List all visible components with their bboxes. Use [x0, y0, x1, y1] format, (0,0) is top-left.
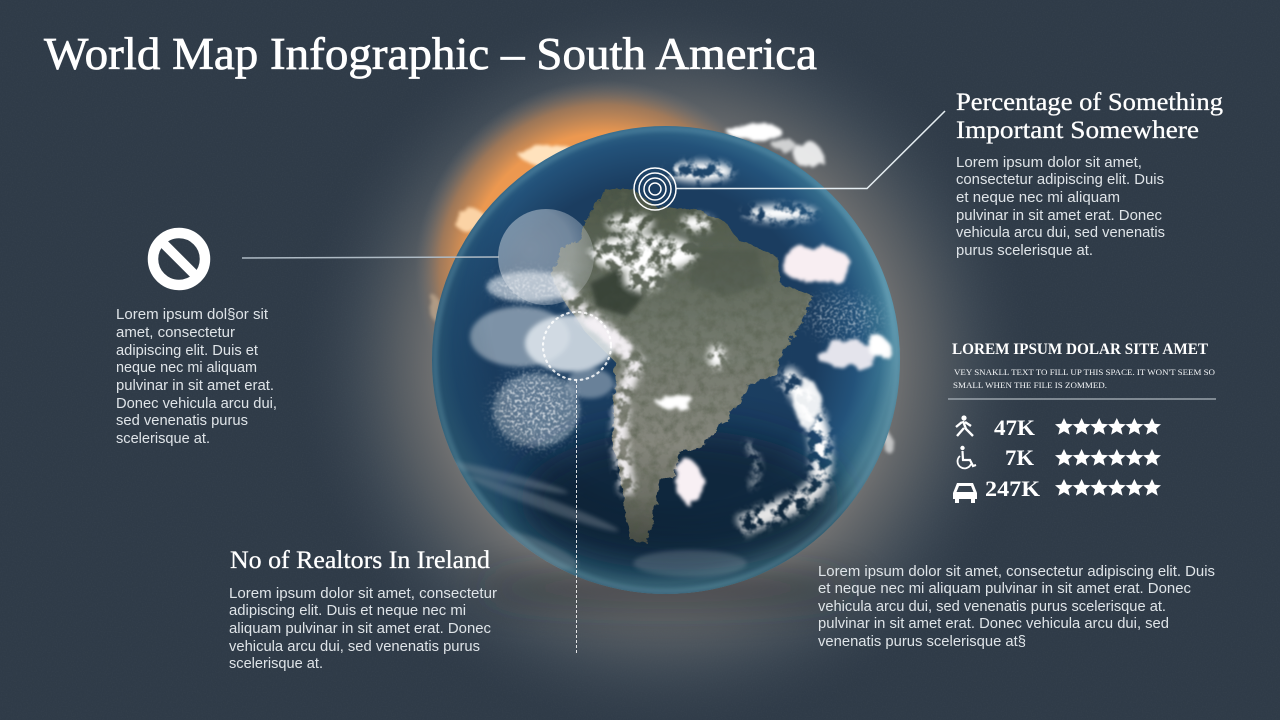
South America landmass: [438, 162, 889, 579]
fine speckled clouds: [493, 275, 880, 447]
broken clouds over the continent: [590, 162, 821, 527]
icon: car: [953, 483, 977, 503]
translucent highlight circle: [498, 209, 594, 305]
lower-right text block: et neque nec mi aliquam pulvinar in sit amet erat. Donec: [818, 580, 1191, 597]
globe: South America: [432, 126, 900, 604]
left text block: Lorem ipsum dol§or sit: [116, 306, 269, 323]
body text: vehicula arcu dui, sed venenatis purus: [229, 638, 480, 655]
dark southern ocean: [520, 430, 840, 570]
stats note: SMALL WHEN THE FILE IS ZOMMED.: [953, 380, 1107, 390]
heading: Important Somewhere: [956, 117, 1199, 144]
ocean sphere: [432, 126, 900, 594]
lower-right text block: Lorem ipsum dolor sit amet, consectetur adipiscing elit. Duis: [818, 563, 1215, 580]
leader line to upper-right callout: [676, 111, 945, 188]
star rating row 2: [1055, 449, 1161, 466]
body text: Lorem ipsum dolor sit amet,: [956, 154, 1142, 171]
lower-right text block: [818, 563, 1215, 650]
star rating row 1: [1055, 418, 1161, 435]
body text: Lorem ipsum dolor sit amet, consectetur: [229, 585, 497, 602]
icon: prohibited sign: [153, 233, 205, 285]
star rating row 3: [1055, 479, 1161, 496]
lower-right text block: pulvinar in sit amet erat. Donec vehicula arcu dui, sed: [818, 615, 1169, 632]
body text: aliquam pulvinar in sit amet erat. Donec: [229, 620, 491, 637]
atmosphere rim: [435, 129, 897, 591]
globe shadow: [478, 572, 858, 604]
left text block: pulvinar in sit amet erat.: [116, 377, 274, 394]
icon: wheelchair: [958, 446, 976, 468]
lower-right text block: venenatis purus scelerisque at§: [818, 633, 1026, 650]
left text block: neque nec mi aliquam: [116, 359, 257, 376]
grey glow behind globe: [295, 0, 1035, 720]
body text: [229, 585, 497, 672]
stat: 247K: 247K: [985, 476, 1040, 501]
left text block: [116, 306, 277, 447]
stats note: VEY SNAKLL TEXT TO FILL UP THIS SPACE. IT WON'T SEEM SO: [954, 367, 1215, 377]
body text: et neque nec mi aliquam: [956, 189, 1120, 206]
lower-right text block: vehicula arcu dui, sed venenatis purus scelerisque at.: [818, 598, 1166, 615]
heading: [956, 89, 1224, 144]
body text: adipiscing elit. Duis et neque nec mi: [229, 602, 466, 619]
body text: [956, 154, 1165, 259]
leader line to prohibited icon: [242, 257, 499, 258]
stat: 47K: 47K: [994, 415, 1035, 440]
stats heading: LOREM IPSUM DOLAR SITE AMET: [952, 341, 1208, 358]
left text block: Donec vehicula arcu dui,: [116, 395, 277, 412]
left text block: sed venenatis purus: [116, 412, 248, 429]
dense cumulus clouds: [657, 247, 889, 503]
stats note: [953, 367, 1215, 390]
orange sun glow behind globe: [415, 80, 795, 460]
panel: stats: [948, 341, 1216, 503]
dotted marker circle: [543, 312, 611, 380]
title: World Map Infographic – South America: [44, 29, 817, 79]
body text: consectetur adipiscing elit. Duis: [956, 171, 1164, 188]
left text block: amet, consectetur: [116, 324, 235, 341]
heading: No of Realtors In Ireland: [230, 547, 491, 574]
icon: pedestrian: [956, 415, 973, 436]
body text: purus scelerisque at.: [956, 242, 1093, 259]
left text block: adipiscing elit. Duis et: [116, 342, 259, 359]
Pacific cloud mass: [438, 272, 747, 579]
stat: 7K: 7K: [1005, 445, 1034, 470]
icon: target rings: [634, 168, 676, 210]
left text block: scelerisque at.: [116, 430, 210, 447]
clouds behind the globe rim: [430, 123, 897, 452]
body text: vehicula arcu dui, sed venenatis: [956, 224, 1165, 241]
sphere edge shading: [432, 209, 900, 594]
body text: pulvinar in sit amet erat. Donec: [956, 207, 1162, 224]
heading: Percentage of Something: [956, 89, 1224, 116]
body text: scelerisque at.: [229, 655, 323, 672]
callout: no of realtors: [229, 547, 497, 672]
Andes ridge: [558, 277, 637, 493]
dashed leader line: [576, 380, 578, 655]
callout: percentage of something: [956, 89, 1224, 259]
